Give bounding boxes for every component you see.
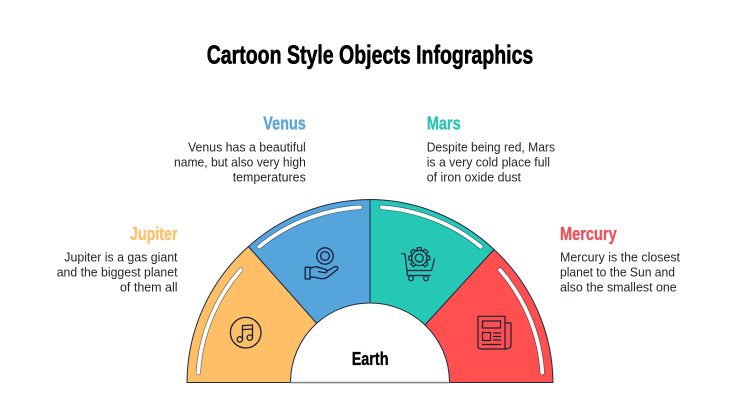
- segment: Mars: [370, 200, 494, 325]
- text block: Mars: Mars: [427, 114, 461, 134]
- text block: Mercury: [560, 224, 680, 295]
- icon: hand holding coin: [305, 248, 338, 279]
- text block: Venus: temperatures: [233, 171, 306, 185]
- center: Earth base line: [290, 382, 450, 384]
- icon: music note: [230, 317, 261, 348]
- text block: Mars: [427, 114, 555, 185]
- text block: Mars: Despite being red, Mars: [427, 141, 555, 155]
- text block: Jupiter: and the biggest planet: [57, 266, 178, 280]
- text block: Mercury: Mercury is the closest: [560, 251, 680, 265]
- text block: Jupiter: [57, 224, 178, 295]
- text block: Venus: name, but also very high: [174, 156, 306, 170]
- title: Cartoon Style Objects Infographics: [207, 39, 533, 69]
- text block: Mars: is a very cold place full: [427, 156, 550, 170]
- segment: Mercury: [425, 250, 553, 382]
- icon: shopping cart with gear: [402, 248, 434, 281]
- icon: newspaper: [478, 316, 511, 349]
- text block: Mercury: Mercury: [560, 224, 617, 244]
- text block: Venus: [174, 114, 306, 185]
- highlight outline: Jupiter: [198, 270, 241, 373]
- highlight outline: Venus: [259, 207, 360, 247]
- text block: Jupiter: of them all: [120, 281, 178, 295]
- text block: Jupiter: Jupiter is a gas giant: [64, 251, 178, 265]
- semicircle chart: [187, 200, 553, 383]
- text block: Mercury: planet to the Sun and: [560, 266, 675, 280]
- label: Earth: Earth: [352, 349, 388, 369]
- highlight outline: Mercury: [500, 270, 542, 373]
- segment: Venus: [248, 200, 370, 323]
- text block: Jupiter: Jupiter: [130, 224, 178, 244]
- highlight outline: Mars: [382, 207, 481, 247]
- highlight line: Venus: [259, 207, 360, 247]
- highlight line: Jupiter: [198, 270, 241, 373]
- segment: Jupiter: [187, 246, 317, 382]
- highlight line: Mars: [382, 207, 481, 247]
- text block: Venus: Venus has a beautiful: [188, 141, 306, 155]
- highlight line: Mercury: [500, 270, 542, 373]
- text block: Venus: Venus: [263, 114, 306, 134]
- text block: Mars: of iron oxide dust: [427, 171, 521, 185]
- text block: Mercury: also the smallest one: [560, 281, 677, 295]
